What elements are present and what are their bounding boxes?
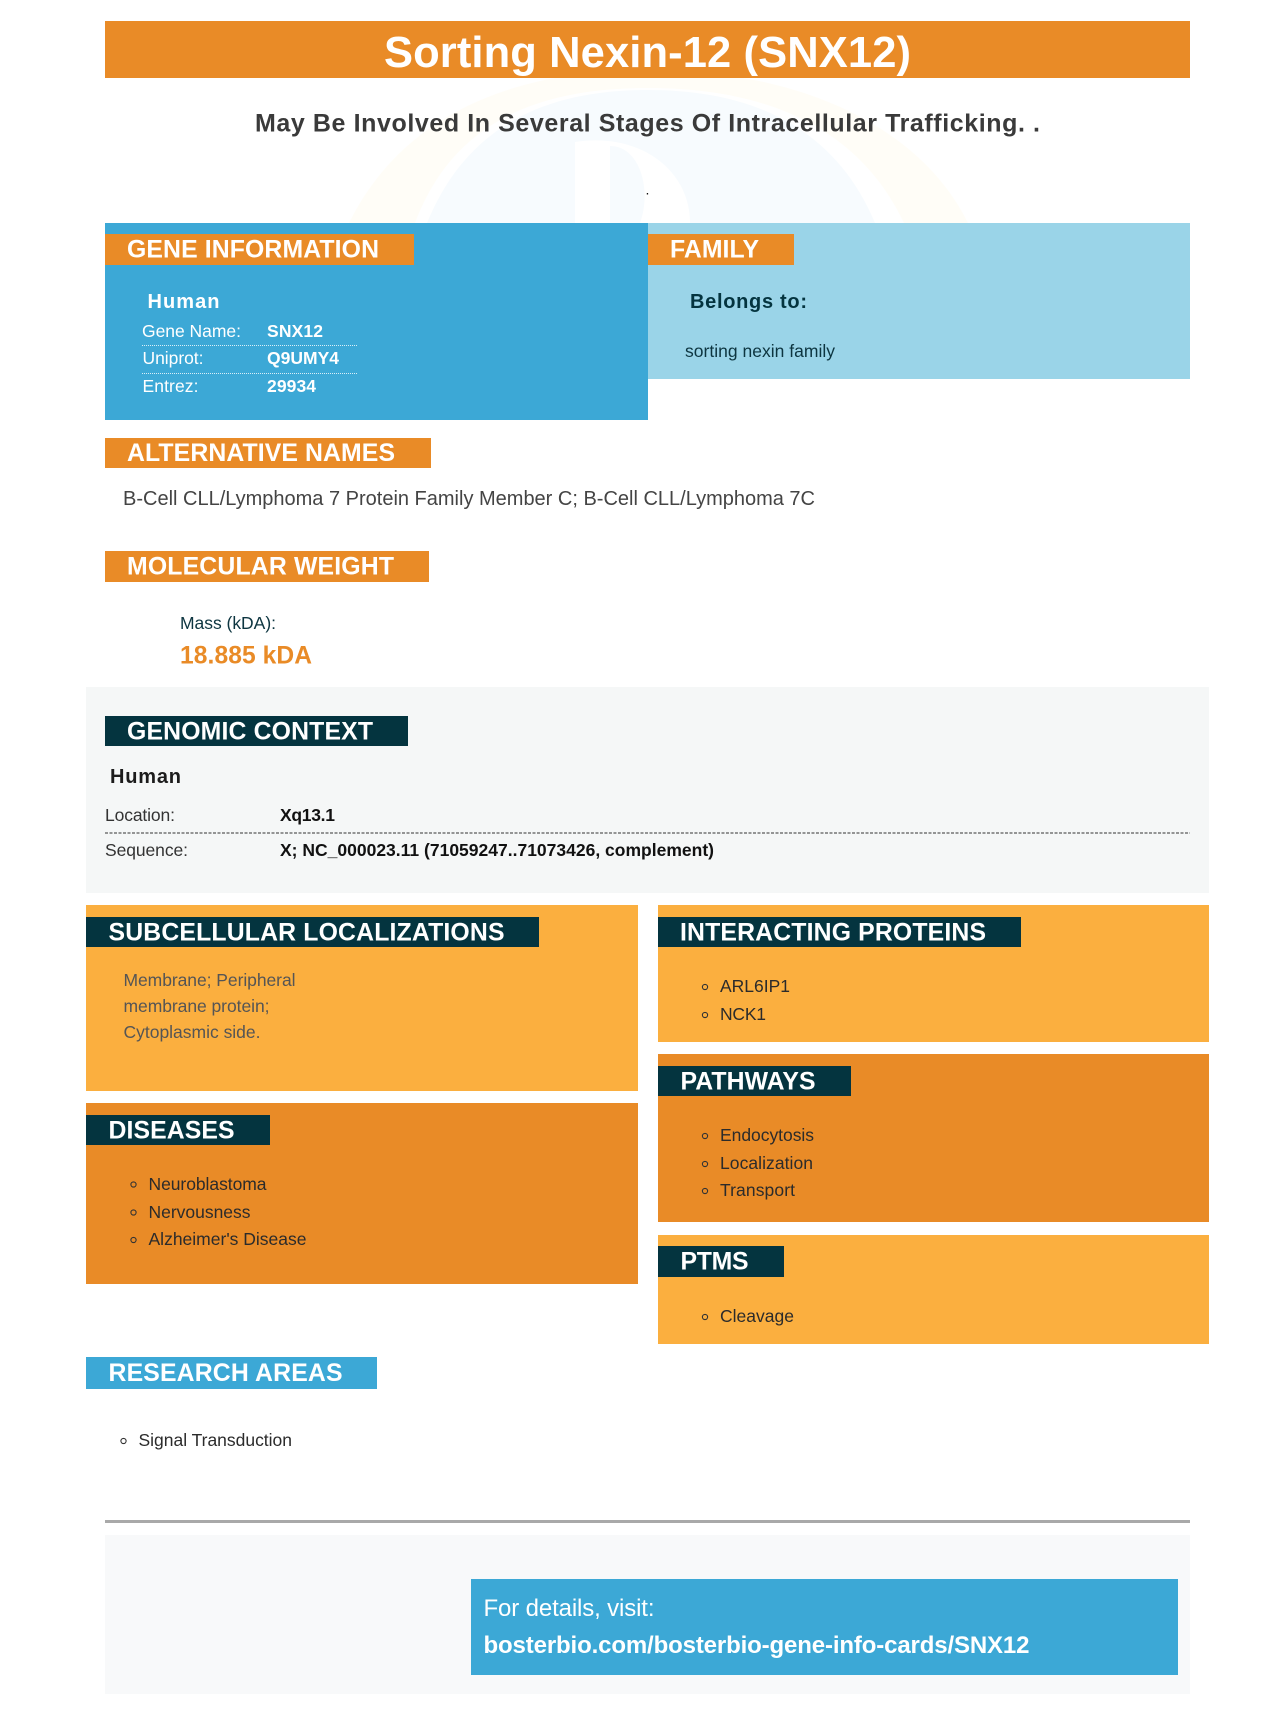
gene details table: Uniprot: [142, 348, 204, 368]
heading: molecular weight: MOLECULAR WEIGHT [127, 554, 394, 580]
callout: details link: For details, visit: [484, 1595, 654, 1622]
gene details table: Q9UMY4 [267, 348, 339, 368]
protein list [702, 976, 790, 1024]
gene details table: Gene Name: [142, 321, 241, 341]
heading: family: FAMILY [670, 236, 759, 264]
gene details table: Entrez: [142, 376, 198, 396]
panel: gene information [105, 223, 648, 420]
heading: research areas: RESEARCH AREAS [108, 1360, 342, 1387]
mass label: Mass (kDA): [180, 613, 276, 633]
localization text [124, 970, 296, 1042]
title: Sorting Nexin-12 (SNX12) [384, 29, 911, 77]
heading: diseases: DISEASES [108, 1118, 234, 1144]
pathway list: Localization [720, 1153, 813, 1173]
panel: footer [105, 1535, 1190, 1694]
species label: Human [110, 766, 181, 788]
panel: alternative names [105, 438, 815, 510]
disease list: Neuroblastoma [148, 1174, 267, 1194]
localization text: membrane protein; [124, 996, 270, 1016]
disease list: Nervousness [148, 1202, 251, 1222]
subtitle: May Be Involved In Several Stages Of Intracellular Trafficking. . [255, 110, 1040, 138]
location row [105, 805, 335, 825]
callout: details link: bosterbio.com/bosterbio-gene-info-cards/SNX12 [484, 1632, 1030, 1659]
panel: diseases [86, 1103, 638, 1284]
pathway list: Endocytosis [720, 1125, 814, 1145]
heading: family [648, 234, 794, 265]
heading: interacting proteins: INTERACTING PROTEINS [680, 920, 986, 946]
mass value: 18.885 kDA [180, 642, 312, 670]
heading: alternative names: ALTERNATIVE NAMES [127, 440, 395, 467]
family name: sorting nexin family [685, 341, 835, 361]
heading: ptms: PTMS [680, 1248, 748, 1276]
watermark logo [349, 70, 968, 223]
protein list: ARL6IP1 [720, 976, 790, 996]
title [105, 21, 1190, 78]
localization text: Cytoplasmic side. [124, 1022, 260, 1042]
sequence row: X; NC_000023.11 (71059247..71073426, complement) [280, 840, 714, 860]
panel: pathways [658, 1054, 1209, 1222]
panel: genomic context [86, 687, 1209, 893]
species label: Human [148, 291, 220, 313]
localization text: Membrane; Peripheral [124, 970, 296, 990]
heading: pathways [658, 1066, 851, 1096]
alternative names text: B-Cell CLL/Lymphoma 7 Protein Family Member C; B-Cell CLL/Lymphoma 7C [123, 488, 815, 510]
heading: subcellular localizations: SUBCELLULAR LOCALIZATIONS [108, 920, 504, 946]
panel: subcellular localizations [86, 905, 638, 1091]
pathway list: Transport [720, 1180, 795, 1200]
heading: genomic context: GENOMIC CONTEXT [127, 718, 373, 746]
heading: ptms [658, 1246, 784, 1277]
pathway list [702, 1125, 814, 1200]
panel: molecular weight [105, 551, 429, 670]
heading: pathways: PATHWAYS [680, 1068, 816, 1096]
gene details table: 29934 [267, 376, 316, 396]
heading: research areas [86, 1357, 377, 1389]
location row: Location: [105, 805, 175, 825]
gene details table: SNX12 [267, 321, 323, 341]
research list: Signal Transduction [138, 1430, 292, 1450]
panel: family [648, 223, 1190, 379]
disease list: Alzheimer's Disease [148, 1229, 306, 1249]
callout: details link [471, 1579, 1178, 1675]
gene details table [142, 321, 357, 396]
heading: gene information: GENE INFORMATION [127, 236, 379, 264]
stray dot: . [646, 182, 649, 198]
belongs to label: Belongs to: [690, 291, 807, 313]
heading: diseases [86, 1115, 270, 1145]
panel: research areas [86, 1357, 377, 1450]
ptm list: Cleavage [720, 1306, 794, 1326]
protein list: NCK1 [720, 1004, 766, 1024]
disease list [131, 1174, 306, 1249]
panel: interacting proteins [658, 905, 1209, 1042]
panel: ptms [658, 1235, 1209, 1344]
location row: Xq13.1 [280, 805, 335, 825]
sequence row: Sequence: [105, 840, 188, 860]
